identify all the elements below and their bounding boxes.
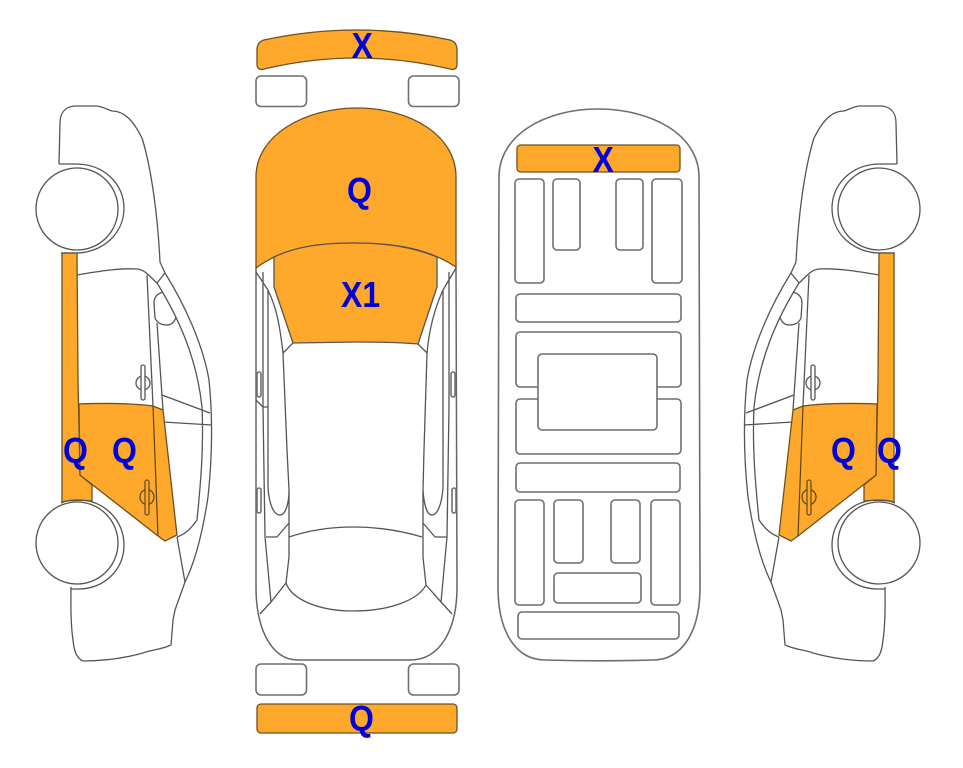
right side view of car [744, 106, 920, 661]
label Q on rear bumper: Q [349, 699, 374, 739]
panel: windshield, orange [274, 243, 437, 344]
left rear wheel arch [61, 500, 124, 589]
panel: left door, orange [79, 403, 177, 541]
top view of car [256, 30, 459, 733]
right car lower door handle [802, 480, 816, 515]
panel: left side rocker, orange [62, 253, 92, 502]
right car upper door handle [806, 365, 820, 400]
car top interior lines [256, 268, 456, 614]
underside view of car [498, 109, 700, 661]
underside outline [498, 109, 700, 661]
left rear wheel [36, 502, 118, 584]
panel: front bumper, orange [257, 30, 457, 69]
label Q on hood: Q [347, 171, 372, 211]
left car body outline [59, 106, 212, 661]
rear left light box [256, 664, 306, 695]
right rear wheel [838, 502, 920, 584]
left car upper door handle [136, 365, 150, 400]
left car lower door handle [140, 480, 154, 515]
left car door and window lines [77, 269, 212, 582]
left front wheel arch [59, 164, 124, 253]
car top body outline [256, 267, 457, 660]
centre floor pan [538, 354, 657, 430]
rear underside rail blocks [515, 500, 680, 605]
panel: right side rocker, orange [864, 253, 894, 502]
panel: front crossmember, orange [517, 145, 680, 172]
lower floor pan [516, 399, 681, 454]
upper floor pan [516, 332, 681, 387]
right front wheel arch [832, 164, 897, 253]
lower cross bar [516, 463, 680, 492]
right front wheel [838, 168, 920, 250]
front right light box [408, 76, 459, 106]
rear cross bar [518, 612, 679, 639]
left side mirror handles [257, 372, 261, 513]
right rear wheel arch [832, 500, 895, 589]
right door fold line [798, 406, 803, 536]
upper cross bar [516, 294, 681, 322]
panel: rear bumper, orange [257, 704, 457, 733]
left car mirror [154, 292, 176, 325]
left front wheel [36, 168, 118, 250]
front underside rail blocks [515, 179, 682, 283]
panel: right door, orange [779, 403, 877, 541]
rear right light box [408, 664, 459, 695]
left label Q door: Q [112, 431, 137, 471]
right car mirror [780, 292, 802, 325]
left label Q outer: Q [63, 431, 88, 471]
panel: hood, orange [256, 108, 456, 268]
label X on front bumper: X [352, 26, 373, 66]
label X1 on windshield: X1 [341, 275, 380, 315]
right label Q outer: Q [877, 431, 902, 471]
left door fold line [153, 406, 158, 536]
right car door and window lines [744, 269, 879, 582]
left side view of car [36, 106, 212, 661]
right car body outline [744, 106, 897, 661]
right side mirror handles [451, 372, 456, 513]
label X on underside: X [592, 140, 614, 180]
right label Q door: Q [831, 431, 856, 471]
front left light box [256, 76, 306, 106]
